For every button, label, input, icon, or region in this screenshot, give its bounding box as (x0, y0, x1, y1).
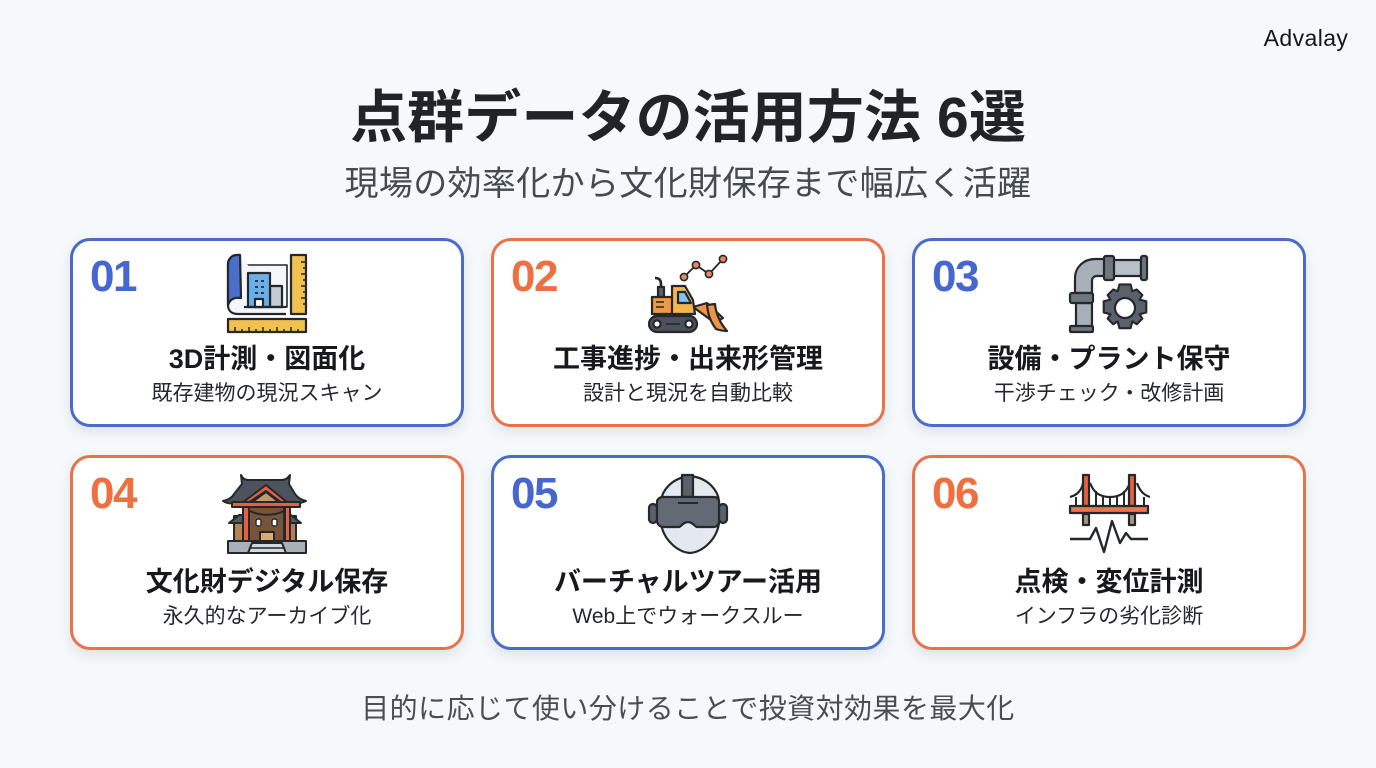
card title: 点検・変位計測 (1014, 567, 1204, 597)
icon: bulldozer with progress chart (648, 254, 728, 334)
icon: blueprint with building and rulers (226, 254, 308, 334)
footer message: 目的に応じて使い分けることで投資対効果を最大化 (361, 693, 1015, 724)
card description: 設計と現況を自動比較 (583, 382, 793, 405)
icon: shrine (222, 474, 307, 554)
panel: card 02 (491, 238, 885, 427)
panel: card 03 (912, 238, 1306, 427)
number 05: 05 (511, 469, 557, 518)
card title: 文化財デジタル保存 (146, 567, 388, 597)
card title: バーチャルツアー活用 (554, 567, 822, 597)
card description: Web上でウォークスルー (572, 605, 804, 628)
brand name: Advalay (1264, 25, 1348, 51)
number 04: 04 (90, 469, 136, 518)
number 06: 06 (932, 469, 978, 518)
icon: pipe and gear (1068, 254, 1148, 334)
card title: 設備・プラント保守 (988, 344, 1230, 374)
subtitle: 現場の効率化から文化財保存まで幅広く活躍 (344, 165, 1032, 203)
card title: 3D計測・図面化 (169, 344, 365, 374)
panel: card 06 (912, 455, 1306, 650)
number 03: 03 (932, 252, 978, 301)
panel: card 05 (491, 455, 885, 650)
icon: bridge and vibration waveform (1068, 474, 1150, 554)
number 02: 02 (511, 252, 557, 301)
number 01: 01 (90, 252, 136, 301)
card title: 工事進捗・出来形管理 (553, 344, 823, 374)
panel: card 01 (70, 238, 464, 427)
card description: 干渉チェック・改修計画 (994, 382, 1224, 405)
title: 点群データの活用方法 6選 (350, 86, 1026, 150)
card description: 永久的なアーカイブ化 (163, 605, 371, 628)
icon: VR headset (648, 474, 728, 554)
card description: インフラの劣化診断 (1015, 605, 1203, 628)
card description: 既存建物の現況スキャン (152, 382, 382, 405)
panel: card 04 (70, 455, 464, 650)
